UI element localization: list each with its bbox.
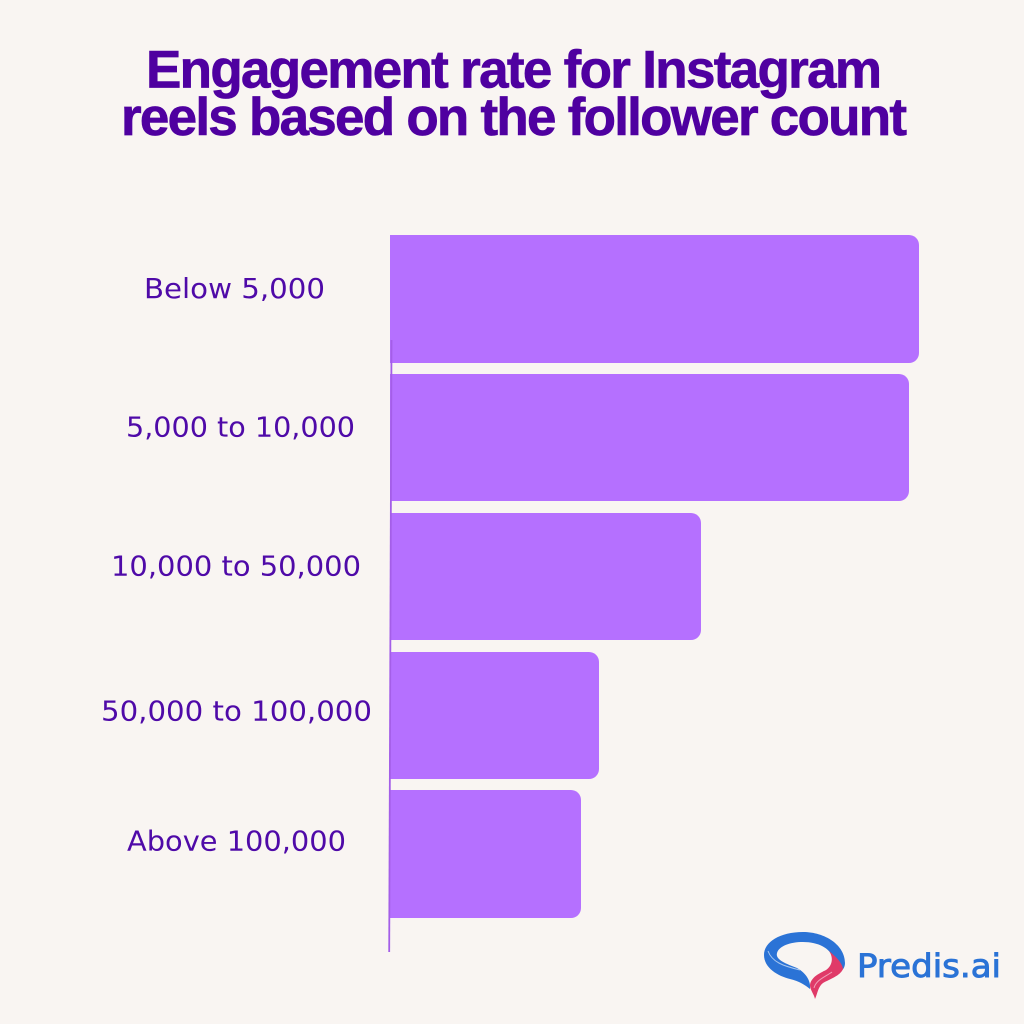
label: 5,000 to 10,000: 5,000 to 10,000	[126, 412, 355, 444]
bar: Above 100,000	[390, 790, 581, 918]
label: 50,000 to 100,000: 50,000 to 100,000	[101, 696, 372, 728]
title: reels based on the follower count	[121, 88, 907, 147]
title: Engagement rate for Instagram	[146, 40, 882, 100]
label: 10,000 to 50,000: 10,000 to 50,000	[111, 550, 361, 582]
bar: 50,000 to 100,000	[390, 652, 599, 779]
title	[121, 40, 907, 147]
label: Above 100,000: Above 100,000	[127, 826, 346, 858]
bar: Below 5,000	[390, 235, 919, 363]
bar: 5,000 to 10,000	[390, 374, 909, 501]
bar chart	[101, 235, 919, 952]
icon: speech bubble brain	[764, 932, 845, 999]
label: Below 5,000: Below 5,000	[144, 273, 325, 305]
axis line	[389, 340, 392, 952]
bar: 10,000 to 50,000	[390, 513, 701, 640]
logo: Predis.ai	[764, 932, 1001, 999]
wordmark: Predis.ai	[857, 947, 1001, 985]
